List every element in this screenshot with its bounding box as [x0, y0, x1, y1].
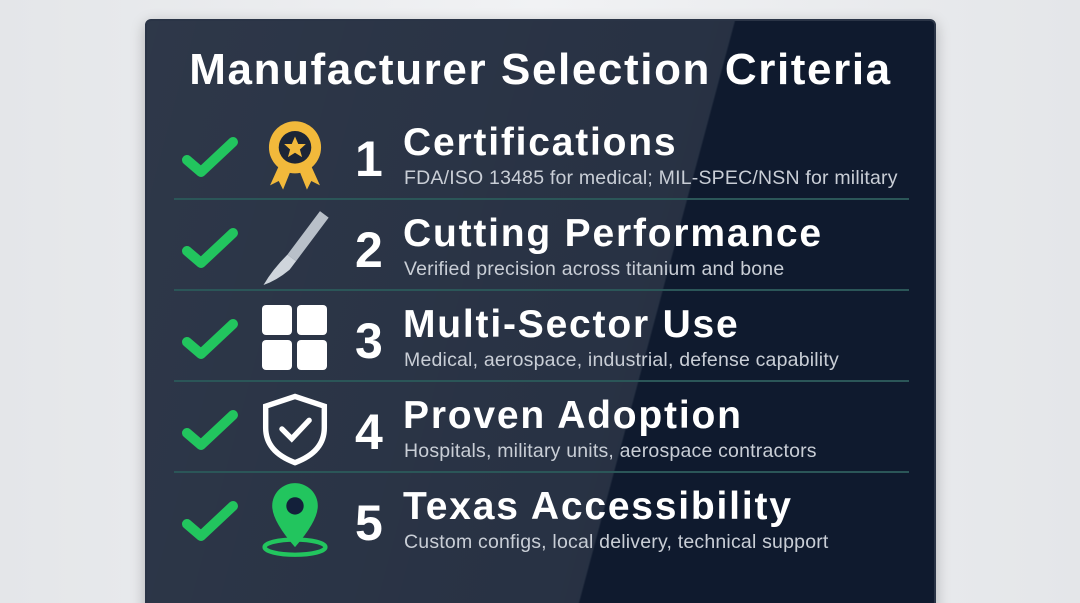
heading: Certifications	[403, 121, 677, 164]
row 4: proven adoption: Hospitals, military units, aerospace contractors	[404, 440, 817, 462]
row 2: cutting performance: 2	[355, 222, 383, 278]
row 1: certifications	[182, 121, 898, 190]
panel: main board	[145, 19, 936, 603]
icon: location pin	[262, 483, 328, 557]
row 3: multi-sector: Medical, aerospace, industrial, defense capability	[404, 349, 839, 371]
row 4: proven adoption	[182, 394, 817, 466]
row 3: multi-sector	[182, 303, 839, 371]
row 5: texas accessibility: Texas Accessibility	[403, 485, 793, 528]
row 3: multi-sector: Multi-Sector Use	[403, 303, 740, 346]
title: Manufacturer Selection Criteria	[189, 45, 892, 94]
icon: scalpel	[264, 211, 329, 285]
icon: grid	[262, 305, 327, 370]
icon: check	[182, 137, 238, 177]
row 2: cutting performance: Cutting Performance	[403, 212, 823, 255]
subtitle: FDA/ISO 13485 for medical; MIL-SPEC/NSN for military	[404, 167, 898, 189]
row 5: texas accessibility: Custom configs, local delivery, technical support	[404, 531, 829, 553]
row 2: cutting performance	[182, 211, 823, 285]
row 3: multi-sector: 3	[355, 313, 383, 369]
row 4: proven adoption: Proven Adoption	[403, 394, 743, 437]
row 4: proven adoption: 4	[355, 404, 383, 460]
icon: award ribbon	[268, 121, 322, 190]
row 5: texas accessibility	[182, 483, 829, 557]
number: 1	[355, 131, 383, 187]
row 5: texas accessibility: 5	[355, 495, 383, 551]
row 2: cutting performance: Verified precision across titanium and bone	[404, 258, 784, 280]
icon: shield	[262, 394, 328, 466]
